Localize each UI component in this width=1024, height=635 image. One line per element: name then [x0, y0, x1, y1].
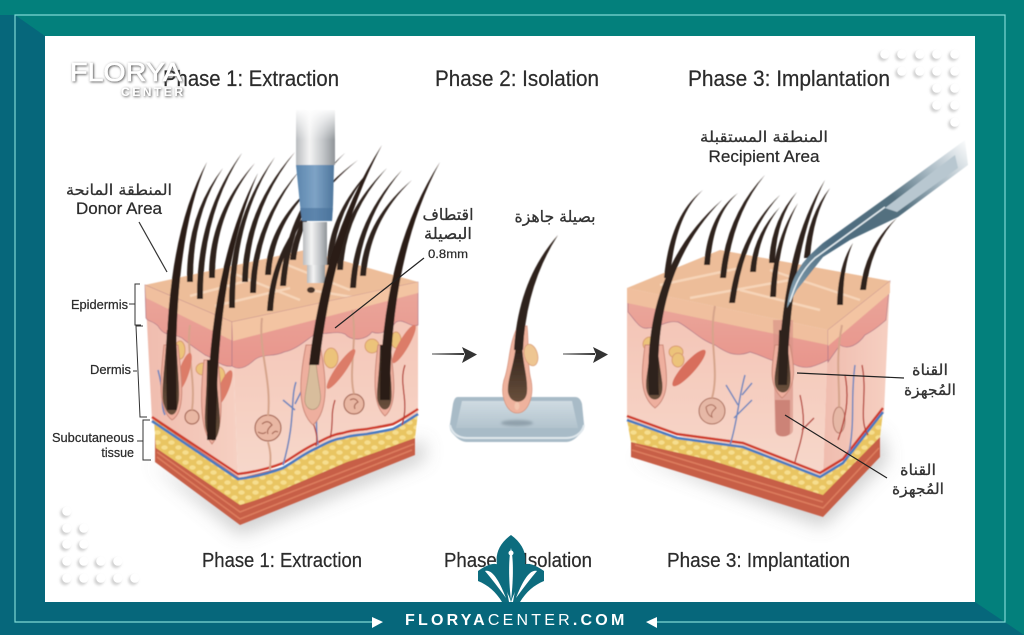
tweezers	[787, 140, 968, 308]
label: epidermis with bracket	[71, 284, 141, 325]
logo: Florya Center watermark: FLORYA	[70, 57, 183, 87]
glands and muscles	[175, 332, 401, 385]
pink band, right	[232, 282, 418, 368]
extraction punch tool	[294, 108, 337, 293]
footer arrow left	[372, 617, 383, 628]
isolated follicle graft	[503, 235, 558, 413]
label: ready graft: بصيلة جاهزة	[514, 207, 596, 227]
follicles	[642, 345, 667, 408]
label: recipient area: Recipient Area	[708, 148, 820, 166]
label: follicle extraction: البصيلة	[424, 224, 472, 243]
left and right dermis	[145, 285, 238, 480]
top heading: phase 2: Phase 2: Isolation	[435, 66, 599, 91]
bottom tissue	[631, 420, 880, 517]
bottom heading: phase 3: Phase 3: Implantation	[667, 550, 850, 572]
leader: donor area	[139, 222, 167, 272]
label: dermis with bracket: Dermis	[90, 363, 131, 377]
top heading: phase 1: Phase 1: Extraction	[163, 66, 339, 91]
logo: Florya Center watermark: CENTER	[121, 85, 183, 99]
vascular band	[627, 408, 883, 473]
decoration: dots bottom-left	[60, 507, 139, 585]
blood vessels	[158, 370, 318, 465]
fat layer	[627, 412, 883, 495]
vessels	[726, 365, 855, 458]
bottom heading: phase 1: Phase 1: Extraction	[202, 550, 362, 572]
metal tray	[450, 397, 584, 442]
bottom heading: phase 2: Phase 2: Isolation	[444, 550, 592, 572]
arrow: phase 2 to phase 3	[563, 347, 608, 363]
label: prepared canal 1: المُجهزة	[904, 381, 956, 399]
label: prepared canal 1	[904, 361, 956, 399]
pink bands	[628, 300, 828, 367]
leader: follicle extraction	[335, 258, 424, 328]
label: donor area	[66, 181, 172, 218]
logo: leaf emblem	[478, 535, 544, 602]
footer URL: FLORYACENTER.COM	[405, 612, 627, 629]
label: prepared canal 1: القناة	[912, 361, 948, 379]
label: prepared canal 2: المُجهزة	[892, 480, 944, 498]
fat layer	[154, 413, 418, 505]
label: donor area: Donor Area	[76, 200, 163, 218]
label: donor area: المنطقة المانحة	[66, 181, 172, 199]
label: recipient area	[700, 128, 828, 166]
label: subcutaneous tissue with bracket: Subcutaneous	[52, 431, 134, 445]
leader: prepared canal 1	[797, 373, 904, 378]
label: epidermis with bracket: Epidermis	[71, 298, 128, 312]
skin block: donor area	[145, 108, 440, 535]
implant canal	[773, 320, 793, 436]
skin block: recipient area	[627, 140, 968, 527]
glands and muscle	[643, 337, 684, 367]
label: follicle extraction: اقتطاف	[422, 205, 474, 224]
label: recipient area: المنطقة المستقبلة	[700, 128, 828, 146]
top heading: phase 3: Phase 3: Implantation	[688, 66, 890, 91]
label: follicle extraction	[422, 205, 474, 261]
footer arrow right	[646, 617, 657, 628]
label: dermis with bracket	[90, 326, 147, 417]
dermis faces	[627, 288, 828, 480]
hairs, recipient area	[648, 175, 897, 395]
label: prepared canal 2	[892, 461, 944, 498]
sweat glands	[185, 394, 364, 441]
decoration: dots top-right	[878, 50, 959, 129]
label: subcutaneous tissue with bracket	[52, 420, 151, 460]
label: follicle extraction: 0.8mm	[428, 247, 468, 261]
arrow: phase 1 to phase 2	[432, 347, 477, 363]
bottom tissue	[155, 420, 415, 525]
top surface	[145, 250, 418, 322]
vascular band	[152, 409, 418, 474]
logo: Florya Center watermark	[70, 57, 183, 99]
pale strip and pink band, left	[145, 285, 232, 366]
label: prepared canal 2: القناة	[900, 461, 936, 479]
hairs, donor area	[187, 152, 412, 311]
label: subcutaneous tissue with bracket: tissue	[101, 446, 134, 460]
top surface	[627, 250, 890, 330]
follicles	[161, 345, 394, 444]
leader: prepared canal 2	[785, 415, 887, 478]
